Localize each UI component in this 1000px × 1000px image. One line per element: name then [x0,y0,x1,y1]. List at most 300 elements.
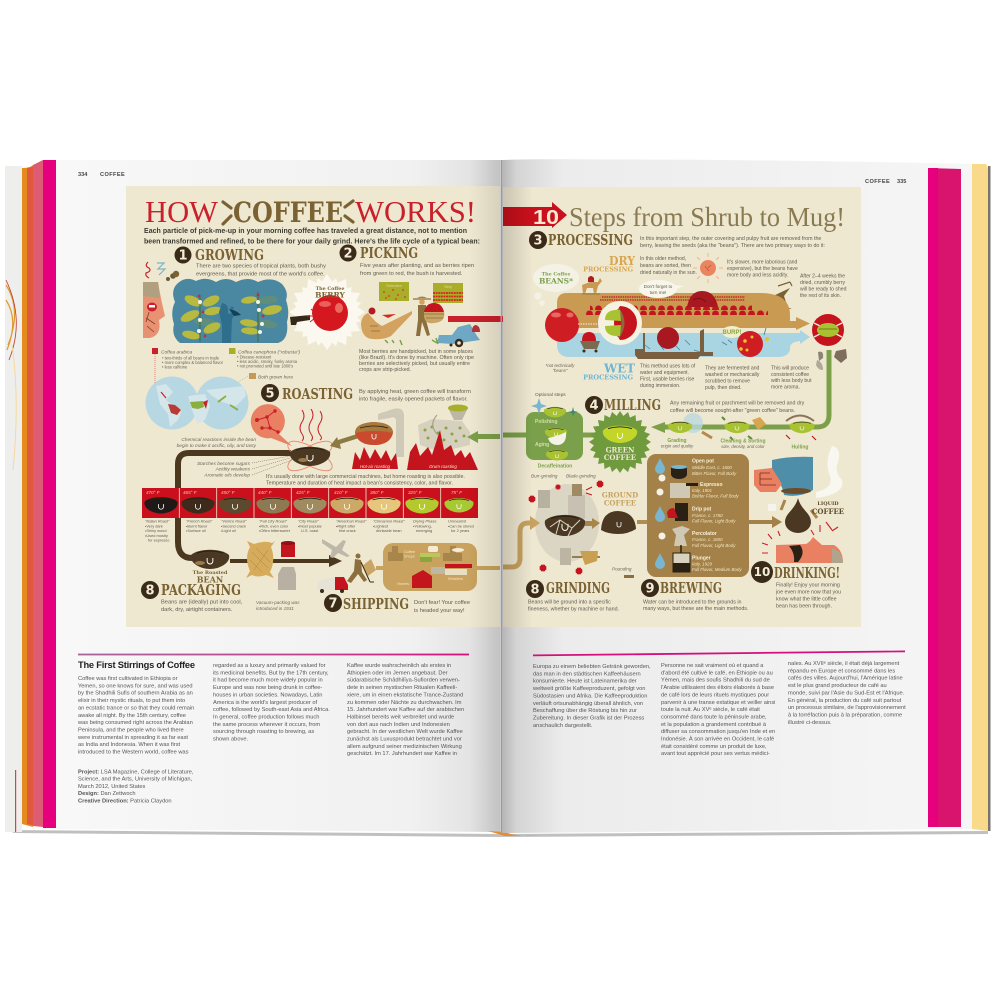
body text column 4 german: Beschaffung über die Röstung bis hin zur [533,708,637,714]
icon: strip picking swatch: Strip [444,285,452,289]
illustration: berry cart [580,332,600,352]
body text column 5 french: Personne ne sait vraiment où et quand a [661,663,763,669]
grinding text: fineness, whether by machine or hand. [528,606,619,612]
body text column 5 french: consommé dans toute la péninsule arabe, [661,714,767,720]
wet processing label: PROCESSING [583,374,633,382]
body text column 3 german: zunächst als Luxusprodukt betrachtet und vor [347,736,462,742]
roasting notes: begin to make it acrific, oily, and tasty [177,443,257,449]
page header right: 335 [897,179,906,185]
arrow: tan arrow head [530,516,540,530]
panel: city destinations: Retailers [448,577,463,581]
brewing text: Water can be introduced to the grounds in [643,600,741,606]
note: not technically beans: *not technically [546,363,574,368]
right column rule [533,650,905,656]
dry text 3: dried, crumbly berry [800,280,845,286]
step 4 text: coffee will become sought-after "green coffee" beans. [670,408,795,414]
step 5 text: By applying heat, green coffee will transform [359,389,471,395]
title: WORKS! [355,194,476,229]
panel: brewing methods: Bitter Flavor, Full Body [692,471,737,476]
step 9 heading: brewing [641,579,722,597]
wet text: more aroma. [771,384,800,390]
milling stages: size, density, and color [721,444,765,449]
arrow: green vertical flow [665,350,829,427]
body text column 1: Peninsula, and the people who lived there [78,727,184,733]
page header right: COFFEE [865,179,890,185]
dry text 3: the rest of its skin. [800,293,841,299]
body text column 6 french: nales. Au XVIIᵉ siècle, il était déjà largement [788,661,899,667]
drinking text: Finally! Enjoy your morning [776,582,840,588]
icon: the coffee berry: BERRY [315,290,345,300]
panel: brewing methods: France, c. 1800 [692,537,723,542]
legend: coffee species: • not promoted until late 1800's [237,364,293,368]
body text column 6 french: illustré ci-dessus. [788,720,832,726]
brewing text: many ways, but these are the main methods. [643,606,748,612]
roast captions: "Venice Roast" [221,518,247,524]
wet text: washed or mechanically [705,372,760,378]
wet processing label [583,362,635,382]
roasting description: Temperature and duration of heat impact a bean's consistency, color, and flavor. [266,480,453,486]
step 1 text: There are two species of tropical plants, both bushy [196,264,326,270]
legend: coffee species: • less caffeine [162,364,188,370]
step 3 heading: processing: 3 [533,234,543,248]
icon: delivery truck [317,577,348,593]
body text column 2: regarded as a luxury and primarily valued for [213,663,326,669]
drinking text: joe even more now that you [775,590,841,596]
body text column 1: elixir in their mystic rituals, to put them into [78,698,185,704]
step 3 text: In this important step, the outer covering and pulpy fruit are removed from the [640,236,821,242]
step 8 heading: packaging [141,581,241,599]
body text column 5 french: l'Arabie utilisaient des élixirs élaborés à base [661,685,774,691]
panel: city destinations [376,543,500,591]
step 10 heading: drinking: DRINKING! [774,564,840,582]
wet text: They are fermented and [705,366,759,372]
icon: the coffee berry: The Coffee [316,286,344,292]
roast captions: •Second crack [221,524,246,528]
title [145,194,476,229]
dry processing label: DRY [609,254,635,268]
decorative brown bar [624,575,634,578]
wet processing label: WET [603,362,635,376]
body text column 5 french: parvenir à une transe extatique et veiller ainsi [661,700,775,706]
project credits: Dan Zettwoch [100,791,136,797]
panel: brewing methods [637,454,749,577]
illustration: water tank [635,327,713,359]
roast captions: •Burnt flavor [186,524,208,528]
body text column 2: In general, coffee production follows much [213,714,319,720]
cloud: the coffee beans label: The Coffee [542,272,570,278]
step 5 heading: roasting: ROASTING [282,385,353,403]
body text column 3 german: südarabische Schādhilīya-Sufiorden verwen- [347,678,460,684]
milling stages [661,413,816,450]
panel: brewing methods: Italy, 1929 [692,562,712,566]
wet text [640,364,812,391]
roast captions: "American Roast" [336,518,366,524]
chart: roast temperature table: 440° F [258,490,273,495]
body text column 6 french: à la torréfaction puis à la préparation, comme [788,712,902,718]
left fore-edge page stack [5,166,22,832]
arrow: number 10 banner [503,202,567,229]
project credits: Project: LSA Magazine, College of Literature, [78,770,193,776]
icon: coffee bag [278,567,296,590]
body text column 2: shown above. [213,736,249,742]
grinding illustration [528,480,604,575]
body text column 1: were instrumental in spreading it as far east [77,735,188,741]
dry text 2: more body and less acidity. [727,272,788,278]
panel: brewing methods: Percolator [692,531,717,537]
chart: world map globes [146,376,248,430]
illustration: rider on mule [582,276,602,295]
step 3 heading: processing: PROCESSING [548,231,633,249]
drinking text: know what the little coffee [776,596,837,602]
dry text 3: will be ready to shed [800,286,847,292]
roast captions: U.S. roast [301,528,319,533]
body text column 2: its medicinal benefits. But by the 17th century, [213,670,329,676]
body text column 5 french: diffuser sa consommation jusqu'en Inde et en [661,729,775,735]
roast captions: "Full City Roast" [259,518,287,524]
wet text: with less body but [771,378,812,384]
panel: brewing methods: Bolder Flavor, Full Body [692,494,739,498]
icon: fermenting berry: BURP! [722,330,742,336]
illustration: hand picking berry [361,308,412,345]
panel: brewing methods: Full Flavor, Light Body [692,518,736,524]
icon: person with hand truck [347,554,376,583]
title: steps from shrub to mug: Steps from Shrub to Mug! [569,202,845,232]
body text column 2: Europe and was now being drunk in coffee- [213,685,322,691]
intro text: been transformed and refined, to be there for your daily grind. Here's the life cycle of a typical bean: [144,238,480,246]
icon: green coffee burst: COFFEE [604,453,636,462]
step 8 heading: grinding: GRINDING [546,579,610,597]
step 8 heading: grinding [526,579,610,598]
wet text: during immersion. [640,383,680,389]
right page [502,160,972,833]
icon: liquid coffee drop: LIQUID [817,501,839,507]
left column rule [78,654,469,655]
icon: selective picking swatch: Selective [386,284,402,288]
icon: sun [693,253,723,283]
legend: coffee species: • Disease-resistant [237,354,271,360]
panel: brewing methods: Full Flavor, Light Body [692,543,736,548]
optional steps label: Optional steps [535,392,566,398]
illustration: hot-air roasting: Hot-air roasting [360,464,391,469]
step 2 text: Five years after planting, and as berries ripen [360,263,474,269]
illustration: farmer with basket [413,296,444,336]
packaging text: Beans are (ideally) put into cool, [161,600,242,606]
left colored page edges [22,160,56,828]
milling stages: Grading [667,438,687,444]
body text column 3 german: zu kommen oder Nächte zu durchwachen. Im [347,700,462,706]
dry processing label: PROCESSING [583,266,633,274]
icon: red steam lines [300,409,322,441]
roast captions: •Shiny wood [145,528,166,533]
body text column 2: the same process wherever it occurs, from [213,722,320,728]
body text column 2: houses in urban societies. Nowadays, Latin [213,692,322,698]
body text column 5 french: Indonésie. À son arrivée en Occident, le café [661,736,774,742]
body text column 6 french: En général, la production du café suit partout [788,698,902,704]
body text column 1: awake all night. By the 15th century, coffee [78,713,186,719]
roasting bean with orbit [284,436,336,476]
dry processing text: beans are sorted, then [640,263,691,269]
illustration: harvester tractor [432,324,480,347]
body text column 6 french: est le plus grand producteur de café au [788,683,887,689]
icon: airplane [322,539,350,558]
arrow: number 10 banner: 10 [533,207,559,229]
step 10 heading: drinking [751,561,840,583]
picking text: (like Brazil). It's done by machine. Often only ripe [359,355,474,361]
icon: ground coffee [601,490,638,534]
note: not technically beans: "beans" [553,368,568,373]
step 1 heading: growing [174,246,264,264]
illustration: worker with rake [764,282,792,312]
arrow: green flow head [651,422,665,433]
roasting description: It's usually done with large commercial machines, but home roasting is also possible. [266,474,465,480]
grinding labels: Pounding [612,566,632,572]
body text column 5 french: d'abord été cultivé le café, en Éthiopie ou au [661,669,773,676]
body text column 4 german: verläuft ortsunabhängig überall ähnlich, von [533,701,643,707]
body text column 4 german: Südostasien und Afrika. Die Kaffeeproduktion [533,693,647,699]
body text column 4 german: konsumierte. Heute ist Lateinamerika der [533,679,637,685]
roast captions: •Yellowing, [413,524,432,528]
chart: roast temperature table: 380° F [370,490,385,495]
roast captions: Unroasted [448,518,466,524]
picking text: crops are strip-picked. [359,367,411,373]
icon: liquid coffee drop: COFFEE [812,507,844,516]
body text column 3 german: dete in seinen mystischen Ritualen Kaffeeli- [347,685,457,691]
grinding labels [531,474,632,572]
panel: brewing methods: Middle East, c. 1600 [692,465,732,470]
wet band [557,330,810,357]
arrow: grinder to ground coffee [585,518,600,529]
milling stages: Hulling [792,444,808,450]
body text column 4 german: das man in den städtischen Kaffeehäusern [533,671,641,677]
roast captions: •Surface oil [186,528,206,533]
wet text: This will produce [771,366,809,372]
icon: strip picking swatch [433,283,463,303]
gutter shading [468,160,533,832]
body text column 3 german: von dort aus nach Indien und Indonesien [347,722,450,728]
body text column 2: coffee, followed by South-east Asia and Africa. [213,707,330,713]
title: HOW [145,194,219,229]
step 5 heading: roasting [261,384,353,403]
roasting notes [177,437,292,478]
right colored page edges [928,164,988,831]
roast captions: •Very dark [145,524,163,528]
step 4 heading: milling: MILLING [604,396,661,414]
picking text: Most berries are handpicked, but in some places [359,349,473,355]
dry band [557,291,810,330]
page header left: COFFEE [100,172,125,178]
roasting notes: Chemical reactions inside the bean [181,438,256,443]
step 3 heading: processing [529,231,633,249]
body text column 5 french: de café lors de leurs rituels mystiques pour [661,692,769,698]
panel: right infographic page [503,187,861,627]
packaging text: dark, dry, airtight containers. [161,607,233,613]
step 9 heading: brewing: BREWING [660,579,722,597]
body text column 5 french: toute la nuit. Au XVᵉ siècle, le café était [661,707,760,713]
roast captions [145,518,474,543]
panel: optional green steps: Aging [535,442,549,448]
chart: roast temperature table: 450° F [221,490,236,495]
milling stages: Cleaning & Sorting [720,438,766,444]
roast captions: for espresso [148,538,169,543]
body text column 1: was being consumed right across the Arabian [77,720,193,726]
body text column 3 german: xiere, um in einen ekstatische Trance-Zustand [347,692,463,698]
grinding labels: Burr-grinding [531,474,558,478]
page header left: 334 [78,172,88,178]
chart: roast temperature table: 465° F [183,490,198,495]
project credits: Science, and the Arts, University of Michigan, [78,777,193,783]
panel: left infographic page [126,186,543,627]
panel: city destinations: Shops [404,554,415,558]
shipping text: is headed your way! [414,608,465,614]
icon: the coffee berry [284,269,370,355]
roast captions: first crack [339,528,356,533]
drinking text: bean has been through. [776,604,832,610]
body text column 6 french: un processus similaire, de l'approvisionnement [788,705,906,711]
icon: tipped blue mug with hand [754,457,813,496]
speech bubble: turn me [639,280,684,298]
legend: coffee species: • more complex & balanced flavor [162,360,224,365]
body text column 2: sourcing through roasting to brewing, as [213,729,314,735]
icon: molecule speech bubble [251,404,292,446]
wet text: water and equipment. [640,370,689,376]
grinding text: Beans will be ground into a specific [528,600,611,606]
speech bubble: turn me: Don't forget to [644,284,672,289]
vacuum note: introduced in 1931 [256,606,294,611]
body text column 3 german: gebracht. In der westlichen Welt wurde Kaffee [347,729,463,735]
arrow: brewing to coffee drop [749,516,782,528]
wet text: First, usable berries rise [640,376,695,382]
page header right [865,179,906,185]
body text column 5 french: Yémen, mais des soufis Shadhili du sud de [661,678,770,684]
roast captions: "Cinnamon Roast" [373,518,405,524]
chart: roast temperature table: 425° F [296,490,311,495]
body text column 3 german: 15. Jahrhundert war Kaffee auf der arabischen [347,707,464,713]
roast captions: •Rich, even color [259,524,289,528]
icon: green coffee burst [582,404,658,480]
roast captions: "French Roast" [186,518,212,524]
arrow: green arrow to roasting [467,431,500,443]
roast captions: emerging [416,528,432,533]
wet text: consistent coffee [771,372,809,378]
step 2 heading: picking: PICKING [360,244,418,262]
roast captions: Drying Phase [413,518,436,524]
legend: coffee species: Coffea canephora ("robusta") [238,350,300,356]
icon: cut berry showing beans [578,301,642,345]
step 1 heading: growing: GROWING [195,246,264,264]
icon: burlap sack [246,541,275,578]
dry text 3: After 2–4 weeks the [800,274,845,280]
cloud: the coffee beans label [533,264,579,306]
panel: brewing methods: Full Flavor, Medium Body [692,567,742,572]
project credits: March 2012, United States [78,784,145,790]
step 7 heading: shipping: 7 [328,596,338,612]
icon: ground coffee: GROUND [602,490,638,500]
body text column 4 german: Zubereitung. In dieser Grafik ist der Prozess [533,715,644,721]
body text column 5 french: avant tout apprécié pour ses vertus médici- [661,751,770,757]
panel: brewing methods: Drip pot [692,506,711,512]
body text column 5 french: était considéré comme un produit de luxe, [661,744,767,750]
step 2 heading: picking: 2 [343,246,353,262]
panel: brewing methods: France, c. 1780 [692,513,723,518]
roasted bean: BEAN [197,574,223,584]
body text column 2: America is the world's largest producer of [213,700,318,706]
step 4 heading: milling: 4 [589,398,599,414]
icon: whole coffee berry [545,308,579,342]
body text column 3 german: Halbinsel bereits weit verbreitet und wurde [347,714,454,720]
roast captions: •Lightest [373,524,389,528]
panel: brewing methods: Italy, 1901 [692,488,712,493]
chart: roast temperature table: 75° F [451,490,463,495]
roast captions: •Light oil [221,528,236,533]
step 8 heading: packaging: 8 [145,584,155,598]
intro text [144,228,480,246]
panel: brewing methods: Open pot [692,458,714,464]
chart: roast temperature table: 470° F [146,490,161,495]
title: COFFEE [233,196,343,229]
body text column 3 german: allem aufgrund seiner medizinischen Wirkung [347,744,462,750]
icon: ground coffee: COFFEE [604,498,636,508]
panel: city destinations: Coffee [404,550,415,554]
roast captions: •Used mostly [145,533,168,538]
dry processing text: In this older method, [640,256,686,262]
body text column 4 german: weltweit größte Kaffeeproduzent, gefolgt von [532,686,645,692]
body text column 4 german: Europa zu einem beliebten Getränk geworden, [533,664,651,670]
illustration: drum roasting: Drum roasting [429,464,457,469]
body text column 2: it had become much more widely popular in [213,678,323,684]
arrow: olive arrow to bean [330,434,359,449]
cloud: the coffee beans label: BEANS* [539,276,573,286]
illustration: hot-air roasting [352,408,404,469]
roasting notes: Acidity weakens [215,467,251,473]
step 8 heading: packaging: PACKAGING [161,581,241,599]
illustration: drum roasting [407,404,478,470]
panel: optional green steps: Decaffeination [538,464,572,470]
roast captions: drinkable bean [376,528,402,533]
shipping text: Don't fear! Your coffee [414,600,470,606]
arrow: dark arrow to shipping [230,555,342,567]
arrow: tan arrow into grinder [503,523,532,567]
wet text: This method uses lots of [640,364,695,370]
vacuum note: Vacuum-packing was [256,600,300,605]
left page [56,160,500,832]
chart: roast temperature table [142,488,478,518]
step 2 text: from green to red, the bush is harvested. [360,271,463,277]
panel: optional green steps [503,398,595,470]
chart: roast temperature table: 410° F [334,490,349,495]
body text column 6 french: monde, suivi par l'Asie du Sud-Est et l'Afrique. [788,690,905,696]
chart: roast temperature table: 325° F [408,490,423,495]
step 1 heading: growing: 1 [178,248,188,264]
arrow: red arrow to processing [448,313,543,327]
legend: coffee species: • two-thirds of all beans in trade [162,356,219,360]
project credits: Creative Direction: [78,798,129,804]
icon: red can [281,541,295,557]
icon: liquid coffee drop [768,498,844,533]
body text column 1: as India and Indonesia. When it was first [78,742,181,748]
body text column 4 german: anschaulich dargestellt. [533,723,593,729]
step 4 heading: milling [585,396,661,414]
body text column 5 french: et la population a grandement contribué à [661,722,767,728]
icon: green coffee burst: GREEN [606,446,635,454]
roasting notes: Aromatic oils develop [203,472,250,478]
icon: sleepy face [143,262,179,338]
heading: the first stirrings of coffee: The First Stirrings of Coffee [78,660,195,670]
dry processing text: dried naturally in the sun. [640,270,697,276]
orange sliver at top of gutter [500,160,795,164]
body text column 3 german: Kaffee wurde wahrscheinlich als erstes in [347,663,451,669]
wet text: scrubbed to remove [705,378,750,384]
body text column 3 german: geschätzt. Im 17. Jahrhundert war Kaffee in [347,751,457,757]
